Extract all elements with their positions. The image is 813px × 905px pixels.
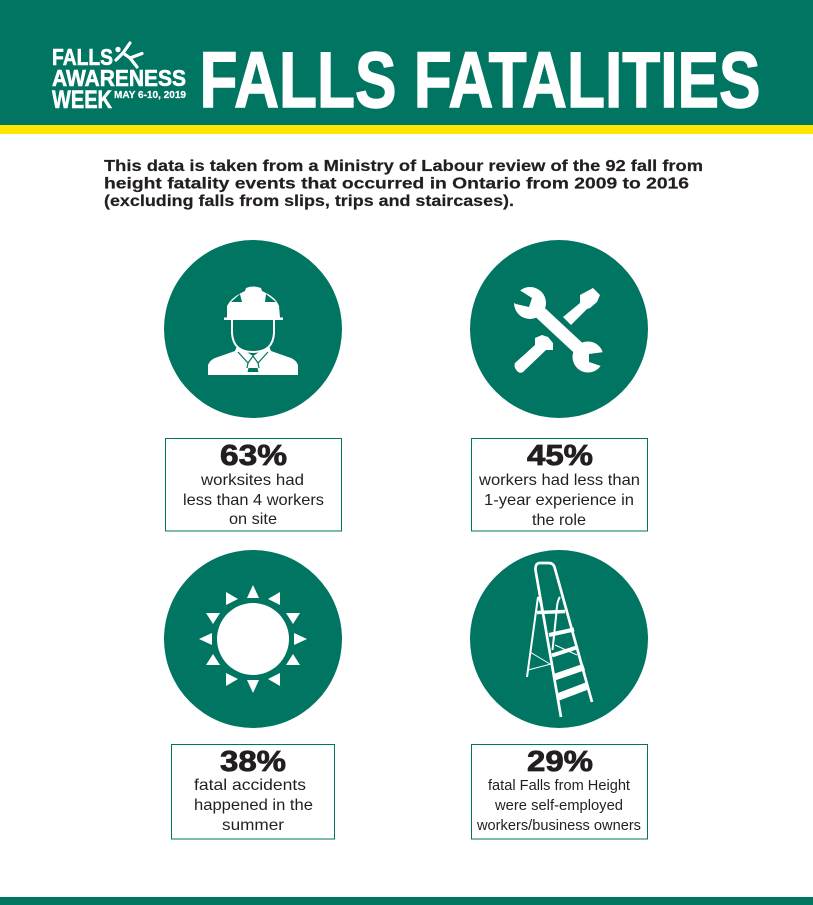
stat box: 38%: summer (222, 817, 285, 834)
intro text: This data is taken from a Ministry of Labour review of the 92 fall from (104, 158, 703, 175)
stat box: 38%: happened in the (194, 797, 313, 814)
stat box: 29%: 29% (527, 746, 593, 778)
stat box: 63% (166, 438, 342, 531)
footer bar (0, 897, 813, 905)
icon: construction worker (164, 240, 342, 418)
stat box: 45%: the role (532, 512, 586, 529)
stat box: 29% (472, 744, 648, 839)
panel: self-employed (470, 550, 648, 839)
logo: Falls Awareness Week (52, 43, 186, 114)
stat box: 45%: workers had less than (478, 472, 640, 489)
stat box: 38%: 38% (220, 746, 286, 778)
icon: wrench and screwdriver (470, 240, 648, 418)
logo: Falls Awareness Week: WEEK (52, 86, 112, 114)
icon: step ladder (470, 550, 648, 728)
icon: sun (164, 550, 342, 728)
panel: worksite size (164, 240, 342, 531)
intro text: height fatality events that occurred in Ontario from 2009 to 2016 (104, 176, 689, 192)
logo: Falls Awareness Week: FALLS (52, 44, 113, 70)
stat box: 38% (172, 744, 334, 839)
header banner (0, 0, 813, 134)
stat box: 29%: workers/business owners (476, 818, 641, 834)
logo: Falls Awareness Week: MAY 6-10, 2019 (114, 90, 186, 101)
intro text (104, 158, 703, 210)
stat box: 38%: fatal accidents (194, 777, 306, 794)
stat box: 45%: 1-year experience in (484, 492, 634, 509)
stat box: 63%: worksites had (200, 472, 304, 489)
stat box: 45% (472, 438, 648, 531)
stat box: 29%: fatal Falls from Height (488, 778, 630, 794)
icon: falling figure (115, 43, 142, 67)
stat box: 63%: on site (229, 511, 277, 528)
intro text: (excluding falls from slips, trips and staircases). (104, 193, 514, 210)
panel: experience (470, 240, 648, 531)
stat box: 63%: less than 4 workers (183, 492, 324, 509)
panel: summer (164, 550, 342, 839)
logo: Falls Awareness Week: AWARENESS (52, 65, 186, 91)
stat box: 29%: were self-employed (494, 798, 623, 814)
stat box: 63%: 63% (220, 440, 287, 472)
stat box: 45%: 45% (527, 440, 593, 472)
